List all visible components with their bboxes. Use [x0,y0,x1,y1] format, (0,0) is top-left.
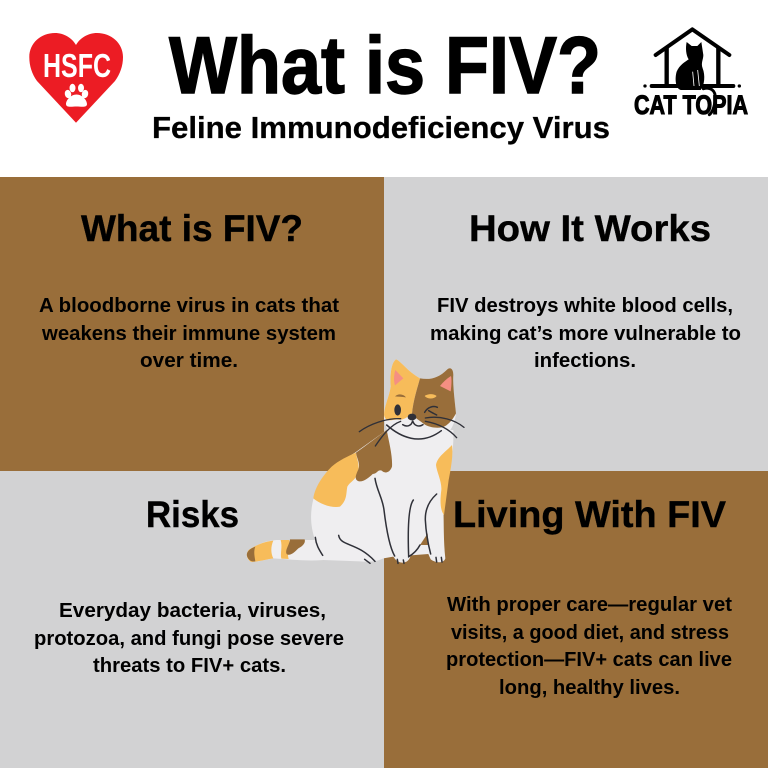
text: Living With FIV description: protection—FIV+ cats can live [446,649,732,671]
text: Living With FIV description: long, healthy lives. [499,677,680,699]
text: What is FIV description: over time. [140,350,238,372]
cat orange back patch [313,453,359,507]
heading: What is FIV: What is FIV? [81,208,303,249]
title: What is FIV? [169,21,601,111]
text: Risks description: threats to FIV+ cats. [93,655,286,677]
panel: Living With FIV [384,471,768,768]
text: What is FIV description: A bloodborne virus in cats that [39,295,339,317]
text: What is FIV description [39,295,339,372]
heading: Risks: Risks [146,494,239,535]
text: What is FIV description: weakens their immune system [41,323,336,345]
cat orange chest patch [436,445,452,515]
panel: What is FIV [0,177,384,471]
heading: Living With FIV: Living With FIV [453,494,726,535]
text: Risks description [34,600,344,677]
text: Risks description: Everyday bacteria, viruses, [59,600,326,622]
logo: Cat Topia [634,29,748,120]
cat brown shoulder patch [356,430,392,481]
text: Living With FIV description [446,594,732,699]
text: Risks description: protozoa, and fungi pose severe [34,628,344,650]
text: Living With FIV description: visits, a good diet, and stress [451,622,729,644]
text: How It Works description [430,295,741,372]
illustration: calico cat [247,359,464,563]
cat leg and paw lines [315,478,442,563]
subtitle: Feline Immunodeficiency Virus [152,110,610,145]
cat body [247,430,453,563]
heading: How It Works: How It Works [469,208,711,249]
text: How It Works description: making cat’s more vulnerable to [430,323,741,345]
cat tail markings [247,539,305,562]
panel: Risks [0,471,384,768]
text: How It Works description: FIV destroys white blood cells, [437,295,733,317]
cat whiskers [359,417,464,446]
panel: How It Works [384,177,768,471]
cat head [384,359,456,441]
logo: HSFC heart [29,33,123,123]
cat brown gap between legs [420,533,429,545]
text: Living With FIV description: With proper care—regular vet [447,594,732,616]
logo: HSFC heart: HSFC [43,47,111,84]
text: How It Works description: infections. [534,350,636,372]
